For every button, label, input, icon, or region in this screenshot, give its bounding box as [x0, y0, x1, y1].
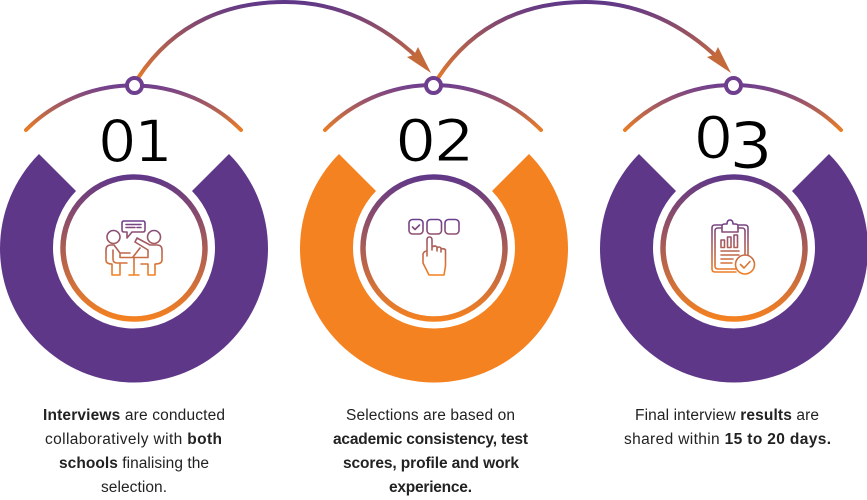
open purple ring	[0, 154, 268, 383]
description 1: collaboratively with both	[45, 431, 222, 448]
top arc with node 1	[26, 78, 241, 130]
description 2: scores, profile and work	[343, 455, 519, 472]
description 1: selection.	[101, 479, 167, 496]
description 3: shared within 15 to 20 days.	[624, 431, 831, 448]
top arc with node 3	[625, 78, 841, 130]
icon: selection hand	[409, 220, 459, 275]
inner gradient ring	[663, 177, 805, 319]
panel: step 2	[300, 78, 568, 496]
icon: interview meeting	[106, 221, 162, 275]
panel: step 1	[0, 78, 268, 496]
number 03: 3	[729, 108, 769, 183]
description 2: Selections are based on	[346, 407, 515, 424]
arrow: step 2 to step 3	[438, 2, 731, 78]
inner gradient ring	[363, 177, 505, 319]
inner gradient ring	[63, 177, 205, 319]
description 3: Final interview results are	[635, 407, 819, 424]
open orange ring	[300, 154, 568, 383]
number 03: 0	[694, 105, 729, 172]
description 1: schools finalising the	[59, 455, 209, 472]
panel: step 3	[600, 78, 867, 448]
description 1: Interviews are conducted	[43, 407, 225, 424]
number 02: 02	[395, 107, 472, 175]
arrow: step 1 to step 2	[138, 2, 431, 78]
number 01: 01	[98, 109, 170, 176]
description 2: experience.	[389, 479, 472, 496]
top arc with node 2	[325, 78, 541, 130]
icon: results clipboard	[712, 220, 754, 274]
description 2: academic consistency, test	[333, 431, 528, 448]
open purple ring	[600, 154, 867, 383]
